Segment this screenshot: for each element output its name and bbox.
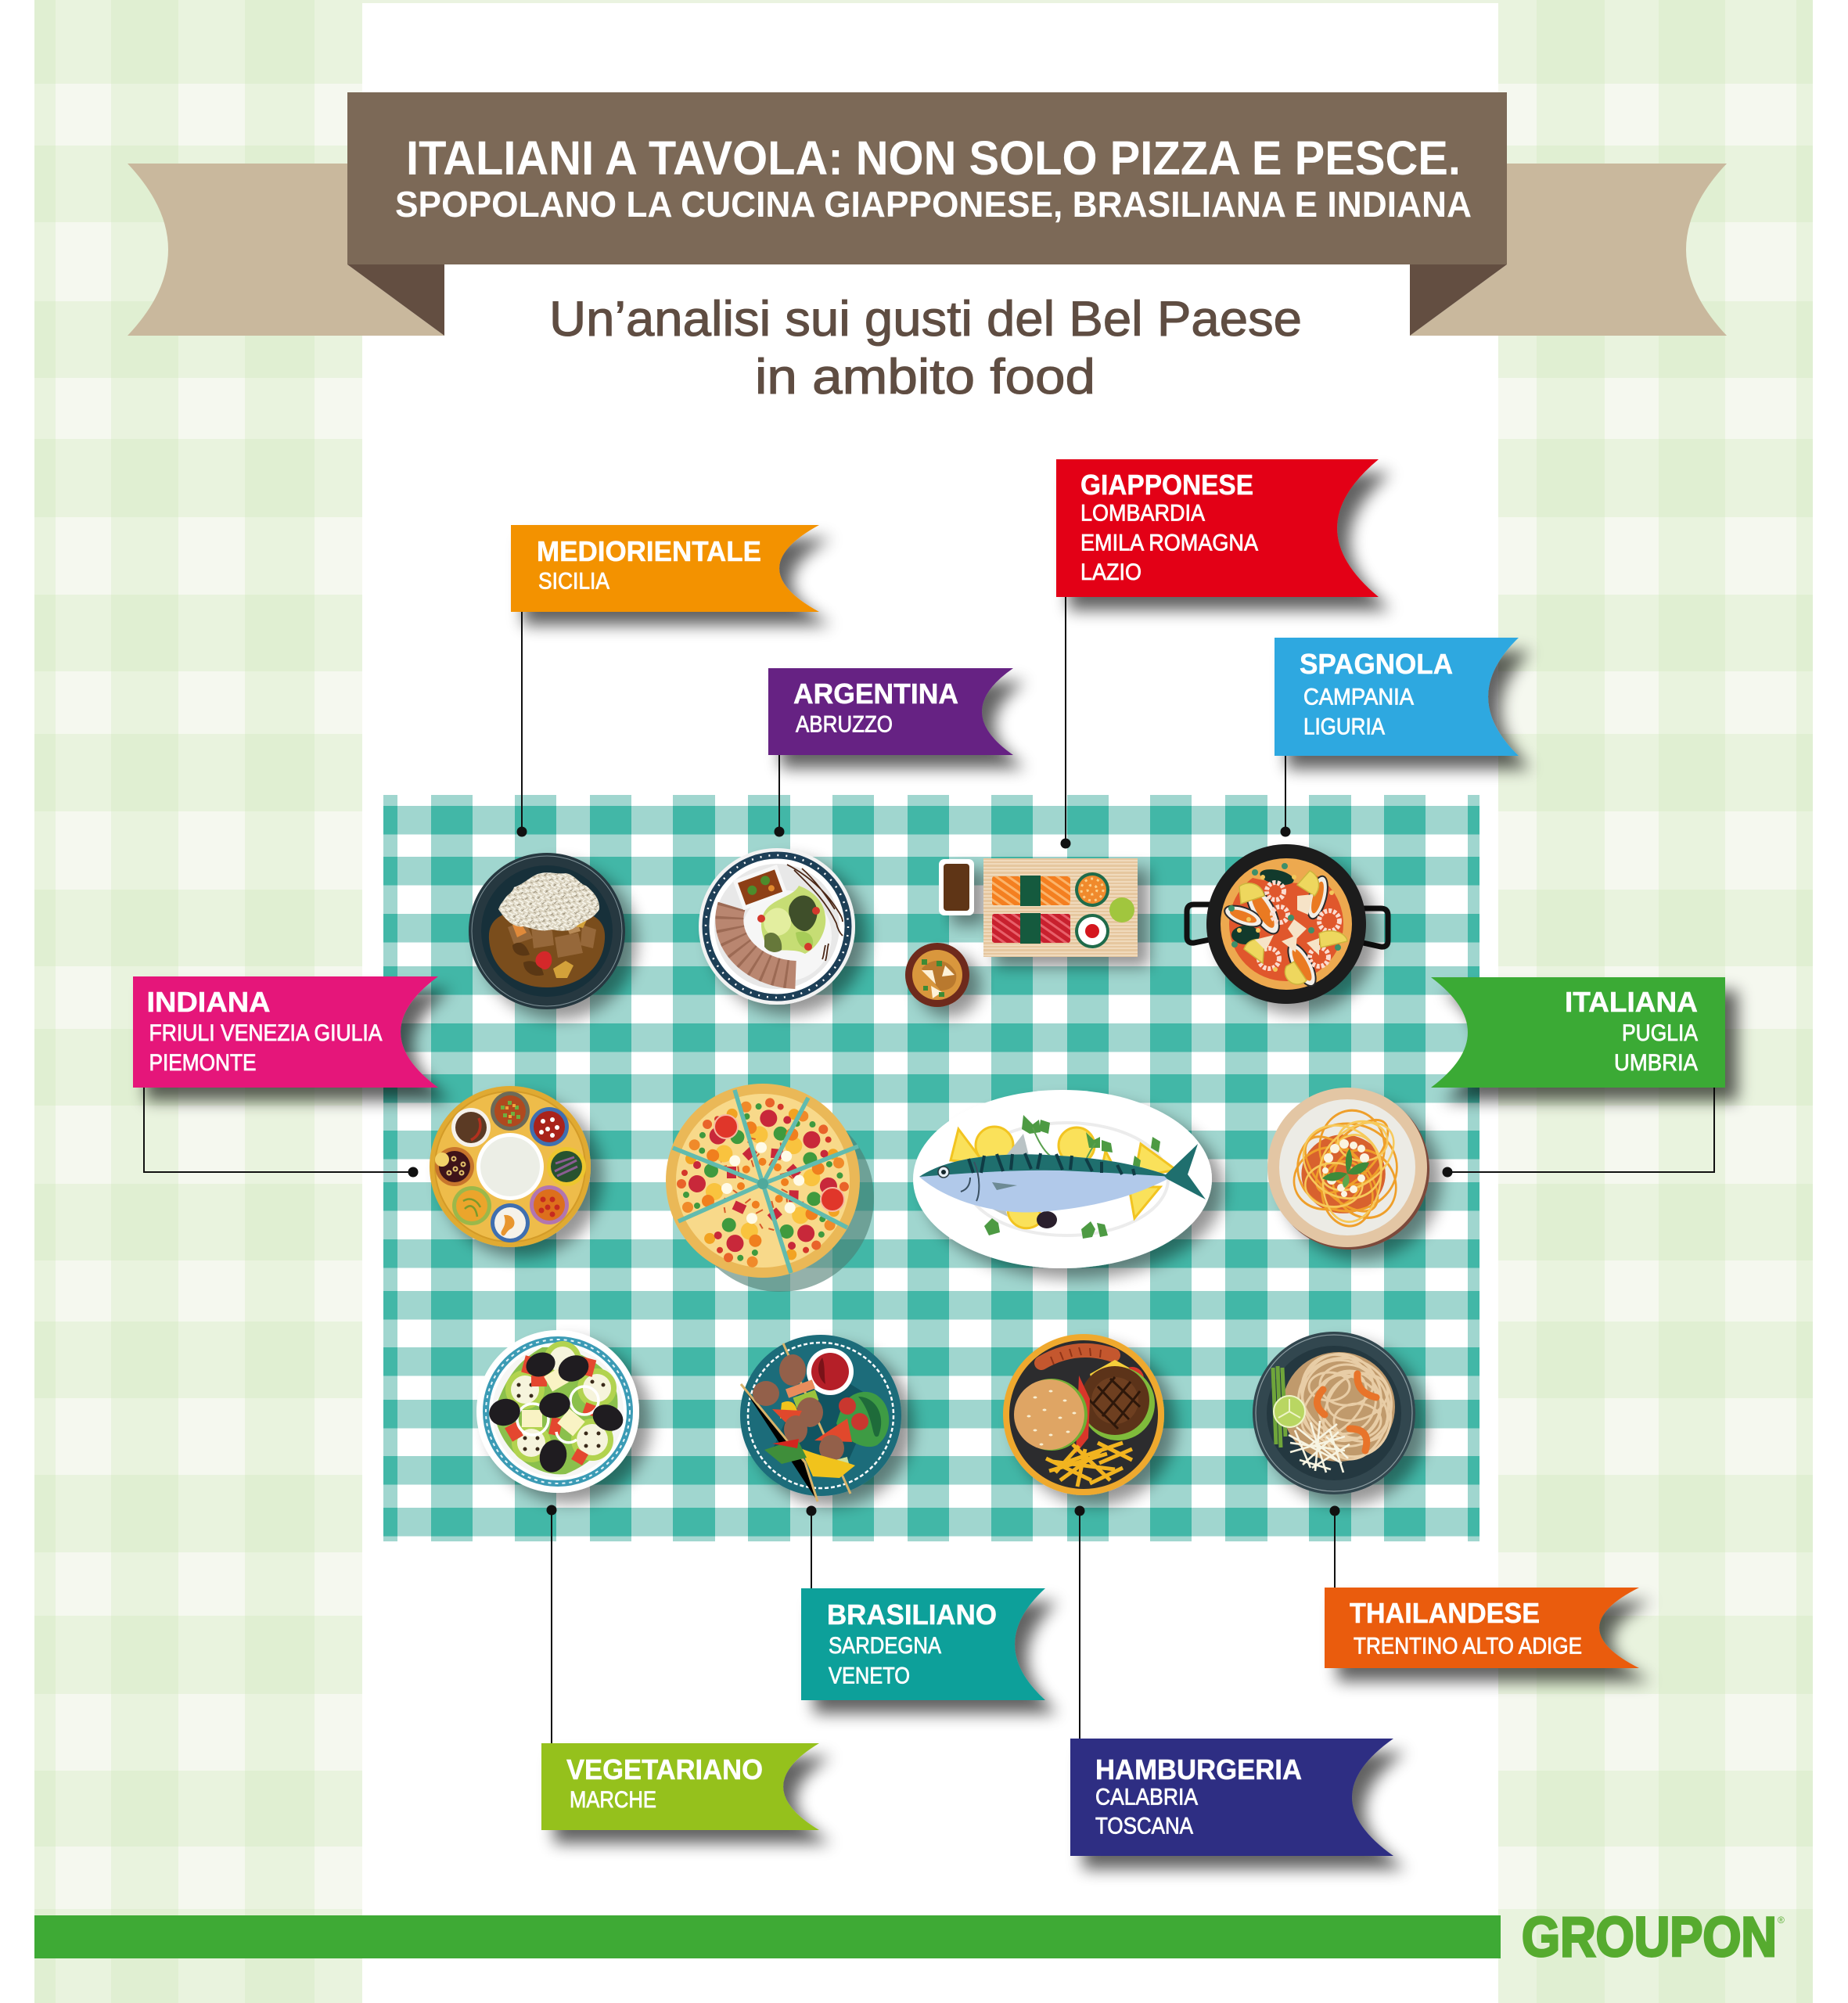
title line 2: SPOPOLANO LA CUCINA GIAPPONESE, BRASILIANA E INDIANA: [395, 184, 1472, 225]
flag: hamburgeria: HAMBURGERIA: [1095, 1753, 1302, 1785]
dish: pad thai: [1253, 1332, 1415, 1494]
miso bowl: [905, 943, 969, 1007]
dish: indian thali: [430, 1086, 591, 1247]
slice gaps: [673, 1090, 858, 1273]
flag: argentina: ABRUZZO: [796, 712, 893, 737]
flag: giapponese: LAZIO: [1080, 559, 1142, 585]
salad: [836, 1392, 889, 1447]
fish body: [919, 1154, 1172, 1213]
flag: thailandese: TRENTINO ALTO ADIGE: [1354, 1634, 1582, 1659]
dish: pizza: [666, 1084, 874, 1292]
flag: hamburgeria: [1070, 1739, 1393, 1856]
flag: indiana: PIEMONTE: [149, 1050, 257, 1076]
dish: burger and fries: [1003, 1334, 1164, 1495]
fins: [1006, 1134, 1030, 1159]
green onions: [1273, 1366, 1285, 1447]
connector: hamburgeria: [1075, 1505, 1084, 1739]
flag: vegetariano: MARCHE: [570, 1787, 656, 1813]
flag: brasiliano: BRASILIANO: [827, 1598, 997, 1631]
logo: groupon: ®: [1778, 1915, 1785, 1926]
basil: [1322, 1149, 1369, 1188]
connector: indiana: [144, 1088, 418, 1177]
connector: thailandese: [1330, 1505, 1339, 1588]
flag: indiana: INDIANA: [147, 986, 271, 1018]
side bowls: [435, 1091, 586, 1242]
subtitle: [549, 292, 1302, 405]
flag: vegetariano: VEGETARIANO: [566, 1753, 763, 1785]
ribbon fold left: [347, 264, 444, 336]
dark mussels: [1259, 867, 1295, 887]
steak slices: [729, 906, 796, 975]
subtitle: in ambito food: [755, 350, 1095, 405]
sauce dish: [733, 865, 788, 910]
tablecloth: [383, 795, 1479, 1541]
logo: groupon: GROUPON: [1522, 1907, 1777, 1969]
feta: [522, 1367, 585, 1437]
onion rings: [517, 1386, 599, 1443]
connector: argentina: [775, 755, 784, 837]
dish: greek salad: [476, 1330, 639, 1493]
tomatoes: [505, 1355, 597, 1465]
flag: brasiliano: VENETO: [829, 1663, 910, 1688]
connector: giapponese: [1061, 597, 1070, 848]
dish: steak with salad: [699, 848, 855, 1005]
tuna nigiri: [992, 913, 1070, 944]
ribbon tail left: [128, 164, 444, 336]
tail: [1164, 1144, 1206, 1199]
title: ITALIANI A TAVOLA: NON SOLO PIZZA E PESCE.: [406, 131, 1461, 185]
pizza shadow: [686, 1104, 874, 1292]
lemon wedges: [1239, 871, 1347, 984]
flag: thailandese: THAILANDESE: [1350, 1597, 1540, 1629]
flag: indiana: FRIULI VENEZIA GIULIA: [149, 1020, 382, 1046]
flag: mediorientale: MEDIORIENTALE: [537, 535, 761, 567]
olive: [1037, 1211, 1057, 1228]
tomato slice: [1120, 1367, 1144, 1390]
flag: spagnola: [1275, 638, 1519, 756]
flag: hamburgeria: TOSCANA: [1095, 1814, 1193, 1839]
fish head: [938, 1167, 949, 1178]
flag: brasiliano: SARDEGNA: [829, 1633, 941, 1659]
central rice bowl: [476, 1133, 544, 1200]
sausage: [1041, 1350, 1113, 1363]
ribbon tail right: [1410, 164, 1727, 336]
flag: argentina: ARGENTINA: [793, 678, 958, 710]
header ribbon: [128, 92, 1727, 336]
fish chunks: [1255, 894, 1319, 955]
flag: giapponese: [1056, 459, 1379, 597]
connector: mediorientale: [516, 612, 527, 837]
peas: [1228, 863, 1341, 951]
connector: brasiliano: [806, 1505, 817, 1588]
flag: hamburgeria: CALABRIA: [1095, 1784, 1198, 1811]
top plaid strip: [362, 0, 1498, 3]
soy sauce dish: [939, 859, 974, 915]
flag: spagnola: LIGURIA: [1303, 714, 1385, 740]
salmon nigiri: [992, 876, 1070, 906]
dish: brazilian skewers: [740, 1335, 901, 1501]
lemons: [951, 1127, 1176, 1228]
dish: sushi set: [905, 858, 1138, 1007]
wasabi: [1109, 897, 1134, 922]
flag: giapponese: LOMBARDIA: [1080, 501, 1205, 526]
cheese: [1322, 1139, 1369, 1197]
dish: fish on plate: [913, 1090, 1212, 1268]
bean sprouts: [1289, 1421, 1350, 1473]
herbs: [984, 1115, 1160, 1239]
mussels: [1222, 874, 1332, 990]
tuna roll: [1075, 914, 1109, 948]
flag: argentina: [768, 668, 1013, 755]
salad leaves: [761, 886, 825, 954]
flag: italiana: PUGLIA: [1622, 1020, 1698, 1046]
flag: spagnola: SPAGNOLA: [1300, 648, 1453, 680]
noodles: [1289, 1102, 1407, 1235]
skewer 1: [783, 1343, 850, 1494]
wooden board: [983, 858, 1138, 957]
shrimp: [1317, 1374, 1376, 1451]
dish: spaghetti: [1267, 1088, 1429, 1250]
sauce bowl: [807, 1348, 854, 1395]
ribbon band: [347, 92, 1507, 264]
cucumbers: [505, 1341, 617, 1462]
flag: brasiliano: [801, 1588, 1045, 1700]
bun burger: [1014, 1375, 1090, 1454]
connector: italiana: [1443, 1088, 1714, 1177]
footer bar: [34, 1915, 1501, 1958]
ribbon fold right: [1410, 264, 1507, 336]
flag: italiana: UMBRIA: [1614, 1050, 1698, 1076]
dish: curry with rice: [469, 853, 625, 1009]
flag: spagnola: CAMPANIA: [1303, 684, 1414, 710]
flag: italiana: [1431, 977, 1725, 1088]
subtitle: Un’analisi sui gusti del Bel Paese: [549, 292, 1302, 347]
lime: [1274, 1396, 1305, 1427]
dish: paella: [1187, 844, 1388, 1004]
flag: indiana: [133, 976, 438, 1088]
olives: [486, 1348, 627, 1476]
roe roll: [1075, 872, 1109, 907]
chocolate drizzle: [787, 865, 843, 961]
noodle base: [1282, 1352, 1395, 1462]
flag: vegetariano: [541, 1743, 819, 1830]
tomato slices: [714, 1115, 844, 1211]
lettuce base: [494, 1347, 617, 1474]
connector: spagnola: [1280, 756, 1291, 837]
flag: mediorientale: SICILIA: [538, 568, 609, 595]
patty burger: [1080, 1360, 1155, 1440]
skewer 2: [741, 1384, 818, 1501]
flag: italiana: ITALIANA: [1565, 986, 1698, 1018]
fries: [1046, 1443, 1132, 1487]
shrimp: [1259, 883, 1339, 969]
flag: giapponese: EMILA ROMAGNA: [1080, 530, 1258, 556]
noodles: [1285, 1341, 1408, 1473]
connector: vegetariano: [546, 1505, 557, 1743]
pan handles: [1187, 904, 1388, 947]
flag: giapponese: GIAPPONESE: [1080, 469, 1253, 501]
flag: mediorientale: [511, 525, 819, 612]
flag: thailandese: [1325, 1588, 1639, 1668]
